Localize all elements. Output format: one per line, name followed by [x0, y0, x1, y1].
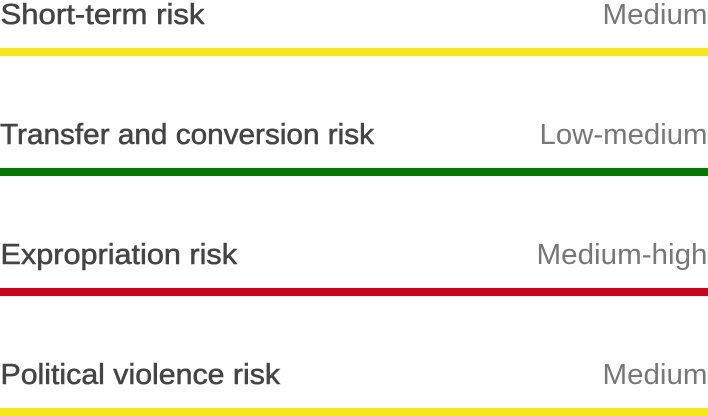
rating bar: green [0, 168, 708, 176]
rating bar: yellow [0, 48, 708, 56]
label: transfer and conversion risk: Transfer and conversion risk [0, 119, 375, 151]
row: short-term risk [0, 0, 708, 56]
row: expropriation risk [0, 239, 708, 296]
label: political violence risk: Political violence risk [0, 359, 281, 391]
rating bar: red [0, 288, 708, 296]
rating bar: yellow [0, 408, 708, 416]
label: expropriation risk: Expropriation risk [0, 239, 238, 271]
rating: medium: Medium [602, 359, 708, 391]
rating: medium-high: Medium-high [536, 239, 708, 271]
rating: low-medium: Low-medium [540, 119, 708, 151]
row: political violence risk [0, 359, 708, 416]
row: transfer and conversion risk [0, 119, 708, 176]
